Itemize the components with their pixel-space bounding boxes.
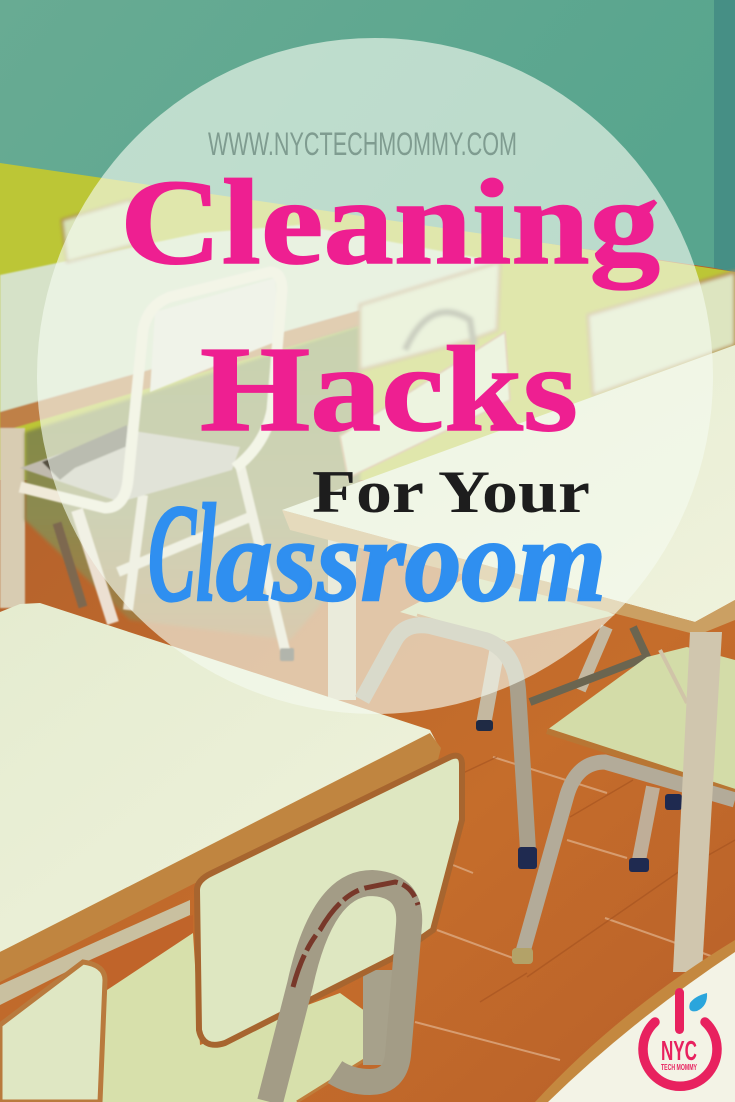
near leg <box>328 530 356 700</box>
right chair <box>512 647 735 964</box>
back chair <box>360 262 500 370</box>
logo text NYC: NYC <box>661 1035 697 1066</box>
middle chair back <box>340 332 510 478</box>
translucent circle <box>37 38 713 714</box>
logo: NYC Tech Mommy <box>643 988 717 1086</box>
under-desk shadow area <box>25 326 360 640</box>
front chair back <box>197 756 462 1045</box>
front chair rear tube <box>363 970 393 1065</box>
floor <box>0 440 735 1102</box>
far right chair back <box>588 272 735 395</box>
small far chair <box>62 200 150 262</box>
wall panel right <box>714 0 735 272</box>
title: Hacks: Hacks <box>200 322 578 457</box>
floor tile lines <box>415 757 735 1060</box>
teal upper wall <box>0 0 735 272</box>
small bottom-left chair <box>0 962 105 1102</box>
chair under right desk: tube <box>362 625 528 850</box>
desk edge <box>282 510 735 635</box>
bottom-right desk <box>535 940 735 1102</box>
front chair metal tube <box>270 882 418 1102</box>
website url: WWW.NYCTECHMOMMY.COM <box>208 126 517 162</box>
yellow lower wall <box>0 160 735 480</box>
front chair seat <box>97 933 387 1102</box>
rear legs <box>57 523 83 607</box>
chair under right desk: rear legs and bar <box>484 650 497 722</box>
front desk <box>0 603 441 1005</box>
chair under right desk: seat <box>400 560 615 642</box>
right desk group <box>282 345 735 869</box>
script word: Classroom: Classroom <box>148 476 606 631</box>
logo power ring <box>643 1022 717 1086</box>
logo power bar <box>675 988 684 1034</box>
subtitle: For Your: For Your <box>312 459 590 525</box>
desk top <box>282 345 735 622</box>
left white chair <box>20 272 294 661</box>
back left desk <box>0 225 500 608</box>
logo water drop <box>689 993 707 1011</box>
tube frame <box>20 272 282 508</box>
logo text Tech Mommy: TECH MOMMY <box>661 1063 697 1072</box>
right desk leg far <box>673 632 722 972</box>
backrest panel <box>150 278 280 392</box>
front leg <box>77 510 113 623</box>
seat <box>20 430 240 502</box>
title: Cleaning: Cleaning <box>120 155 660 290</box>
